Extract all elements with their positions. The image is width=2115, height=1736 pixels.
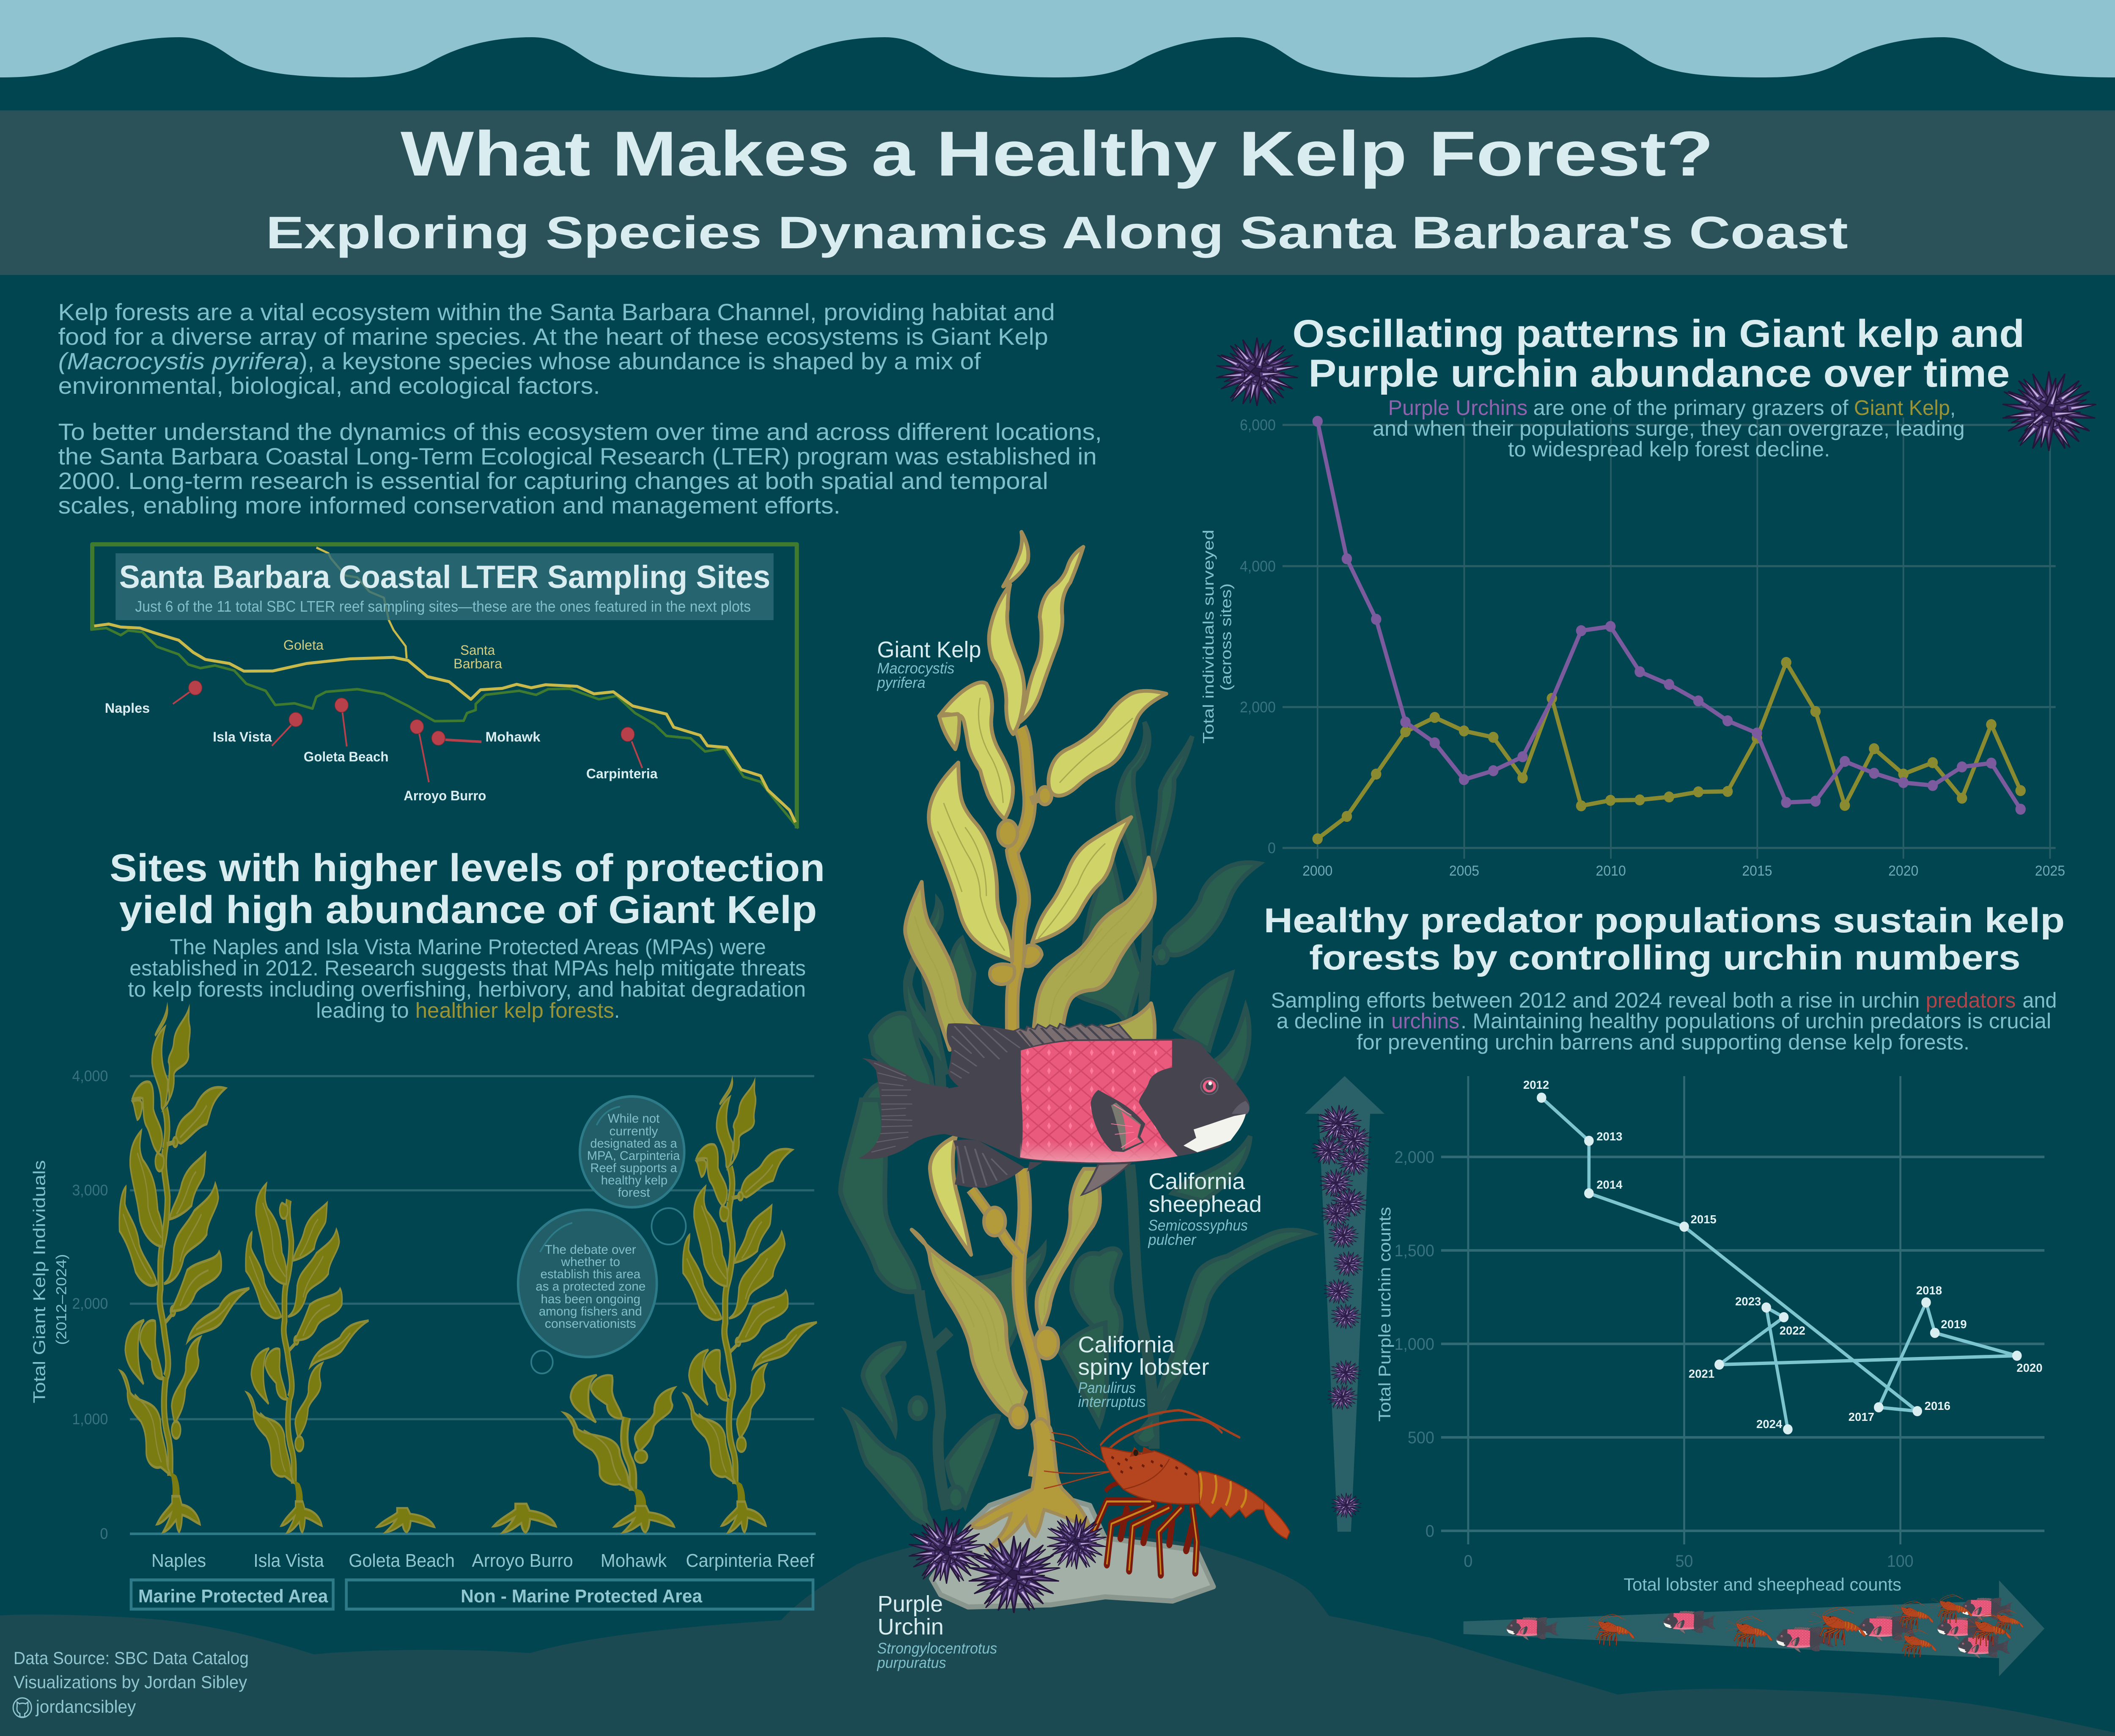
bubble: Carpinteria note: currently	[610, 1124, 658, 1138]
sheephead pictograms	[1506, 1598, 2013, 1659]
x ticks: 2000	[1302, 863, 1332, 879]
label: purple urchin: purpuratus	[877, 1654, 946, 1671]
bubble: Carpinteria note	[580, 1096, 686, 1244]
y axis title	[1200, 530, 1234, 744]
urchin pictograms	[1311, 1105, 1372, 1518]
intro text: ), a keystone species whose abundance is shaped by a mix of	[299, 348, 981, 374]
y axis ticks: 4,000	[72, 1068, 108, 1085]
bubble: Carpinteria note: Reef supports a	[590, 1161, 678, 1175]
city labels: Santa	[460, 643, 495, 658]
intro text: the Santa Barbara Coastal Long-Term Ecological Research (LTER) program was established in	[58, 443, 1097, 470]
y axis ticks: 0	[100, 1525, 108, 1542]
text: protection	[128, 935, 806, 1022]
site labels: Naples	[105, 700, 150, 716]
map banner	[115, 553, 774, 620]
label: california spiny lobster: Panulirus	[1078, 1379, 1136, 1396]
map subtitle: Just 6 of the 11 total SBC LTER reef sampling sites—these are the ones featured in the next plots	[135, 598, 751, 615]
year labels: 2020	[2016, 1361, 2043, 1374]
icon: github	[13, 1698, 31, 1717]
california sheephead	[858, 1023, 1250, 1195]
intro text: food for a diverse array of marine species. At the heart of these ecosystems is Giant Kelp	[58, 324, 1048, 350]
lobster pictograms	[1588, 1595, 2023, 1657]
y ticks: 1,000	[1394, 1335, 1434, 1354]
bubble: protected zone debate: conservationists	[545, 1317, 636, 1331]
label: california spiny lobster: interruptus	[1078, 1393, 1146, 1410]
label: Marine Protected Area	[131, 1580, 333, 1609]
central illustration	[841, 532, 1311, 1671]
year labels: 2012	[1523, 1078, 1549, 1091]
site axis labels: Arroyo Burro	[472, 1550, 573, 1571]
text: protection: leading to	[316, 999, 409, 1022]
label: purple urchin: Strongylocentrotus	[877, 1640, 997, 1657]
text: urchin grazing: and when their populations surge, they can overgraze, leading	[1373, 417, 1965, 440]
text: predators: urchins	[1391, 1009, 1459, 1033]
year points	[1537, 1093, 2022, 1434]
grid	[1283, 425, 2056, 848]
label: Non - Marine Protected Area: Non - Marine Protected Area	[461, 1586, 703, 1607]
y ticks: 0	[1426, 1522, 1434, 1541]
text: predators: predators	[1925, 989, 2016, 1012]
y axis ticks: 3,000	[72, 1182, 108, 1199]
x ticks: 50	[1676, 1552, 1693, 1571]
series: purple urchin	[1313, 416, 2026, 815]
label: Non - Marine Protected Area	[346, 1580, 813, 1609]
bubble: Carpinteria note: forest	[618, 1186, 650, 1200]
label: california spiny lobster: spiny lobster	[1078, 1355, 1209, 1380]
label: purple urchin: Purple	[878, 1592, 943, 1617]
y axis ticks: 2,000	[72, 1295, 108, 1312]
y axis title: Total individuals surveyed	[1200, 530, 1217, 744]
x ticks: 100	[1887, 1552, 1914, 1571]
y ticks	[1240, 417, 1276, 857]
x axis title: Total lobster and sheephead counts	[1623, 1574, 1901, 1594]
year labels: 2018	[1916, 1283, 1942, 1297]
site labels: Carpinteria	[586, 766, 658, 781]
site axis labels: Mohawk	[601, 1550, 667, 1571]
icon: urchin right	[2002, 371, 2097, 451]
year labels: 2013	[1596, 1129, 1623, 1143]
arrow: predators rising	[1464, 1580, 2044, 1676]
intro text	[58, 299, 1102, 519]
site axis labels: Carpinteria Reef	[686, 1550, 814, 1571]
year labels: 2022	[1780, 1324, 1805, 1337]
intro text: Kelp forests are a vital ecosystem within the Santa Barbara Channel, providing habitat and	[58, 299, 1055, 325]
label: california spiny lobster	[1078, 1332, 1209, 1410]
x ticks: 2010	[1596, 863, 1626, 879]
y axis ticks: 1,000	[72, 1411, 108, 1428]
heading: oscillating patterns: Oscillating patterns in Giant kelp and	[1292, 312, 2024, 355]
label: california sheephead	[1148, 1169, 1262, 1248]
kelp: Carpinteria Reef	[683, 1080, 817, 1533]
bubble: protected zone debate: whether to	[561, 1255, 620, 1269]
text: protection: .	[614, 999, 620, 1022]
kelp: Arroyo Burro	[494, 1504, 556, 1533]
y ticks	[1394, 1148, 1434, 1541]
y axis ticks	[72, 1068, 108, 1542]
heading: healthy predators: forests by controlling urchin numbers	[1309, 938, 2021, 977]
x ticks: 2025	[2035, 863, 2065, 879]
kelp pictogram chart	[30, 1007, 817, 1609]
line chart: kelp and urchin over time	[1200, 416, 2065, 879]
x ticks: 2005	[1449, 863, 1479, 879]
heading: protection: Sites with higher levels of protection	[110, 846, 825, 890]
text: urchin grazing: ,	[1950, 396, 1956, 420]
intro text: scales, enabling more informed conservation and management efforts.	[58, 492, 841, 519]
heading: protection	[110, 846, 825, 931]
label: california sheephead: California	[1148, 1169, 1245, 1194]
coastline and roads	[91, 544, 798, 828]
kelp: Goleta Beach	[377, 1508, 434, 1533]
site pins	[189, 681, 634, 745]
bubble: protected zone debate: has been ongoing	[541, 1292, 640, 1306]
subtitle: Exploring Species Dynamics Along Santa Barbara's Coast	[266, 207, 1848, 258]
label: Marine Protected Area: Marine Protected Area	[138, 1586, 329, 1607]
site labels: Mohawk	[486, 729, 541, 744]
sampling sites map	[91, 544, 798, 828]
text: predators: and	[2022, 989, 2057, 1012]
bubble: protected zone debate: The debate over	[545, 1243, 636, 1257]
site axis labels: Naples	[151, 1550, 206, 1571]
purple urchins	[908, 1514, 1107, 1613]
title: What Makes a Healthy Kelp Forest?	[401, 118, 1714, 189]
bubble: Carpinteria note: MPA, Carpinteria	[587, 1149, 680, 1163]
site axis labels: Goleta Beach	[349, 1550, 455, 1571]
label: purple urchin	[877, 1592, 997, 1671]
year labels: 2016	[1925, 1399, 1950, 1412]
site axis labels	[151, 1550, 814, 1571]
credits: Visualizations by Jordan Sibley	[14, 1672, 247, 1692]
label: california sheephead: sheephead	[1148, 1192, 1262, 1217]
year labels	[1523, 1078, 2043, 1431]
text: predators: . Maintaining healthy populations of urchin predators is crucial	[1461, 1009, 2051, 1033]
kelp: Naples	[119, 1007, 250, 1532]
y ticks: 2,000	[1394, 1148, 1434, 1167]
title banner	[0, 110, 2115, 275]
ocean surface waves	[0, 37, 2115, 111]
map title: Santa Barbara Coastal LTER Sampling Sites	[119, 559, 770, 595]
grid lines	[130, 1076, 814, 1419]
year labels: 2024	[1756, 1417, 1782, 1431]
y axis title: Total Giant Kelp Individuals	[30, 1160, 49, 1403]
y ticks: 6,000	[1240, 417, 1276, 434]
series: giant kelp	[1313, 657, 2026, 844]
heading: healthy predators	[1264, 901, 2065, 977]
bubble: Carpinteria note: While not	[608, 1112, 659, 1126]
seafloor	[0, 1534, 2115, 1736]
bubble: Carpinteria note: healthy kelp	[601, 1173, 667, 1187]
credits	[13, 1648, 249, 1717]
heading: oscillating patterns	[1292, 312, 2024, 395]
site axis labels: Isla Vista	[253, 1550, 324, 1571]
text: urchin grazing: are one of the primary grazers of	[1533, 396, 1849, 420]
text: protection: to kelp forests including overfishing, herbivory, and habitat degradation	[128, 978, 806, 1001]
intro text: To better understand the dynamics of this ecosystem over time and across different locations,	[58, 419, 1102, 445]
text: protection: healthier kelp forests	[415, 999, 614, 1022]
kelp: Isla Vista	[246, 1184, 369, 1533]
y ticks: 2,000	[1240, 699, 1276, 716]
intro text: environmental, biological, and ecological factors.	[58, 373, 600, 399]
site labels: Isla Vista	[213, 729, 272, 744]
label: giant kelp	[877, 637, 981, 691]
kelp: Mohawk	[564, 1375, 675, 1533]
text: urchin grazing: to widespread kelp forest decline.	[1508, 438, 1830, 461]
year labels: 2023	[1735, 1294, 1761, 1308]
heading: protection: yield high abundance of Giant Kelp	[119, 888, 817, 931]
background kelp forest	[841, 722, 1311, 1530]
bubble: protected zone debate: among fishers and	[539, 1305, 642, 1318]
year labels: 2015	[1691, 1212, 1717, 1226]
connected scatter chart	[1375, 1076, 2044, 1594]
text: predators	[1271, 989, 2057, 1054]
x ticks: 2015	[1742, 863, 1772, 879]
text: predators: Sampling efforts between 2012 and 2024 reveal both a rise in urchin	[1271, 989, 1920, 1012]
site labels	[105, 700, 658, 803]
text: protection: The Naples and Isla Vista Marine Protected Areas (MPAs) were	[170, 935, 766, 959]
site labels: Arroyo Burro	[404, 788, 486, 803]
year labels: 2017	[1849, 1410, 1874, 1423]
rock	[931, 1489, 1214, 1607]
label: giant kelp: Macrocystis	[877, 660, 954, 677]
x ticks: 2020	[1888, 863, 1918, 879]
label: california sheephead: Semicossyphus	[1148, 1217, 1248, 1234]
text: urchin grazing	[1373, 396, 1965, 461]
credits: jordancsibley	[36, 1697, 136, 1717]
text: urchin grazing: Purple Urchins	[1388, 396, 1527, 420]
y axis title: (across sites)	[1217, 583, 1234, 691]
y axis title	[30, 1160, 69, 1404]
city labels	[283, 637, 503, 671]
y axis title: Total Purple urchin counts	[1375, 1207, 1394, 1422]
x ticks	[1464, 1552, 1914, 1571]
text: predators: for preventing urchin barrens and supporting dense kelp forests.	[1357, 1030, 1969, 1054]
credits: Data Source: SBC Data Catalog	[14, 1648, 249, 1668]
y ticks: 4,000	[1240, 558, 1276, 575]
year labels: 2021	[1689, 1367, 1714, 1380]
arrow: urchins rising	[1305, 1076, 1384, 1532]
heading: oscillating patterns: Purple urchin abundance over time	[1308, 352, 2010, 395]
bubble: protected zone debate: establish this area	[541, 1267, 641, 1281]
site labels: Goleta Beach	[304, 749, 389, 764]
bubble: protected zone debate	[518, 1210, 657, 1373]
giant kelp	[905, 532, 1166, 1550]
sky above the waves	[0, 0, 2115, 80]
label: giant kelp: pyrifera	[877, 674, 926, 691]
grid	[1441, 1157, 2044, 1531]
year labels: 2014	[1596, 1178, 1623, 1191]
x ticks	[1302, 863, 2065, 879]
icon: urchin left	[1215, 338, 1299, 406]
intro text: 2000. Long-term research is essential for capturing changes at both spatial and temporal	[58, 468, 1048, 494]
year labels: 2019	[1941, 1317, 1967, 1331]
text: protection: established in 2012. Research suggests that MPAs help mitigate threats	[129, 956, 806, 980]
city labels: Goleta	[283, 637, 324, 653]
y axis title: (2012–2024)	[53, 1254, 69, 1345]
california spiny lobster	[1044, 1410, 1290, 1574]
y ticks: 500	[1408, 1428, 1434, 1447]
text: predators: a decline in	[1277, 1009, 1384, 1033]
label: giant kelp: Giant Kelp	[877, 637, 981, 662]
intro text: (Macrocystis pyrifera	[58, 348, 299, 374]
heading: healthy predators: Healthy predator populations sustain kelp	[1264, 901, 2065, 939]
y ticks: 1,500	[1394, 1242, 1434, 1260]
y ticks: 0	[1268, 840, 1276, 857]
connected path	[1541, 1098, 2017, 1429]
bubble: protected zone debate: as a protected zone	[536, 1280, 645, 1294]
x ticks: 0	[1464, 1552, 1472, 1571]
label: california sheephead: pulcher	[1148, 1231, 1197, 1248]
city labels: Barbara	[453, 656, 503, 671]
label: purple urchin: Urchin	[878, 1615, 944, 1640]
label: california spiny lobster: California	[1078, 1332, 1175, 1357]
text: urchin grazing: Giant Kelp	[1854, 396, 1950, 420]
bubble: Carpinteria note: designated as a	[590, 1137, 678, 1151]
